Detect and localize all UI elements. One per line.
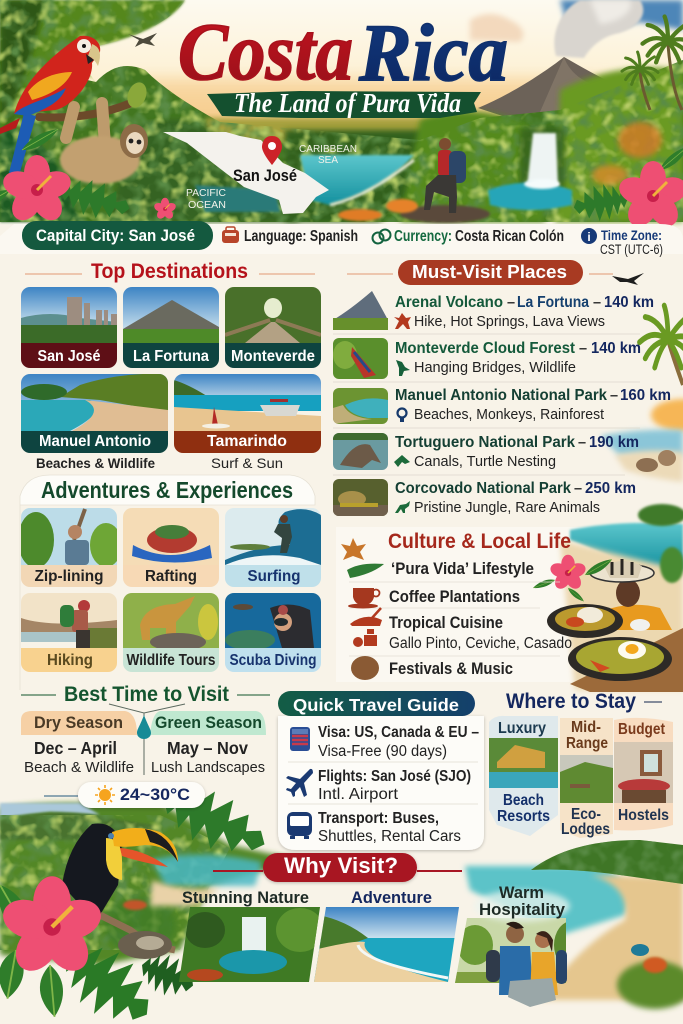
- place: Tortuguero National Park: 190 km: [589, 434, 639, 451]
- hibiscus with leaves: [532, 555, 614, 603]
- panel: quick travel guide: Shuttles, Rental Cars: [318, 828, 461, 845]
- icon: hiker: [394, 313, 411, 329]
- place: Manuel Antonio National Park: [333, 387, 671, 424]
- place: Tortuguero National Park: –: [578, 435, 586, 451]
- title: Rica: [358, 7, 508, 98]
- thumbnail: [333, 291, 388, 330]
- card: zip-lining: [18, 508, 122, 587]
- column: luxury: Resorts: [497, 808, 550, 825]
- map of Costa Rica: [163, 132, 329, 214]
- icon: language: [222, 227, 239, 243]
- place: Corcovado National Park: –: [574, 481, 582, 497]
- card: hiking: Hiking: [47, 652, 93, 669]
- icon: coffee cup: [348, 588, 380, 608]
- key facts bar: CST (UTC-6): [600, 242, 663, 257]
- panel: adventures and experiences: [20, 475, 315, 690]
- place: Arenal Volcano: [333, 291, 654, 330]
- place: Monteverde Cloud Forest: 140 km: [591, 340, 641, 357]
- card: Manuel Antonio: [21, 374, 168, 453]
- heading: where to stay: Where to Stay: [506, 690, 636, 713]
- row dividers: [333, 334, 640, 475]
- map of Costa Rica: San José: [233, 167, 297, 185]
- card: Monteverde: [225, 287, 321, 368]
- destination captions: Surf & Sun: [211, 455, 283, 471]
- reason: stunning nature: [175, 889, 325, 982]
- card: La Fortuna: La Fortuna: [133, 348, 209, 365]
- column: luxury: Luxury: [498, 720, 546, 737]
- card: San José: San José: [38, 348, 101, 365]
- thumbnail: [333, 479, 388, 516]
- place: Corcovado National Park: Pristine Jungle, Rare Animals: [414, 499, 600, 516]
- heading: culture and local life: Culture & Local Life: [388, 530, 571, 553]
- seasons comparison: Dec – April: [34, 738, 117, 758]
- reason: adventure: [314, 889, 460, 982]
- culture list: Coffee Plantations: [389, 588, 520, 606]
- column: mid-range: Range: [566, 735, 608, 752]
- card: zip-lining: Zip-lining: [34, 568, 104, 585]
- panel: culture background beach: [336, 504, 683, 690]
- column: budget: Hostels: [618, 807, 669, 824]
- seasons comparison: May – Nov: [167, 738, 248, 758]
- panel: quick travel guide: Visa: US, Canada & EU –: [318, 724, 479, 741]
- iguana on branch: [100, 915, 175, 959]
- icon: turtle: [394, 455, 410, 467]
- card: surfing: [225, 508, 321, 587]
- place: Arenal Volcano: La Fortuna: [517, 294, 589, 311]
- scarlet macaw on branch: [0, 36, 150, 173]
- header scene: jungle, volcano and river: [0, 0, 683, 223]
- bottom left landscape: [0, 803, 300, 965]
- panel: adventures and experiences: Adventures & Experiences: [41, 477, 293, 503]
- seasons comparison: [21, 704, 266, 776]
- card: scuba diving: [225, 593, 321, 672]
- subtitle banner: The Land of Pura Vida: [234, 88, 461, 118]
- palm leaf: [152, 773, 276, 869]
- heading: must-visit places: [347, 260, 613, 285]
- ocean labels: SEA: [318, 155, 338, 166]
- toucan: [62, 824, 178, 915]
- icon: flower with banner: [341, 538, 384, 578]
- place: Corcovado National Park: 250 km: [585, 480, 636, 497]
- icon: bus: [287, 812, 312, 839]
- heading: quick travel guide: Quick Travel Guide: [293, 695, 459, 715]
- culture list: Tropical Cuisine: [389, 614, 503, 632]
- card: Tamarindo: [174, 374, 321, 453]
- card: hiking: [21, 593, 117, 672]
- heading: quick travel guide: [278, 691, 475, 716]
- card: rafting: [123, 508, 219, 587]
- place: Monteverde Cloud Forest: –: [579, 341, 587, 357]
- icon: plane: [286, 769, 313, 797]
- key facts bar: [0, 221, 683, 257]
- hiker: [424, 138, 466, 213]
- icon: sun: [95, 785, 115, 805]
- icon: visa passport: [290, 727, 310, 751]
- right side scenery: palm, sun glow, beach: [600, 306, 683, 482]
- thumbnail: [333, 433, 388, 470]
- icon: monkey: [398, 408, 406, 422]
- place: Tortuguero National Park: Canals, Turtle Nesting: [414, 453, 556, 470]
- place: Monteverde Cloud Forest: Monteverde Cloud Forest: [395, 340, 576, 357]
- heading: why visit: Why Visit?: [284, 853, 398, 878]
- title: [178, 6, 508, 98]
- thumbnail: [333, 338, 388, 379]
- reason: warm hospitality: [455, 886, 574, 1007]
- card: rafting: Rafting: [145, 568, 197, 585]
- key facts bar: Costa Rican Colón: [455, 228, 564, 245]
- panel: quick travel guide: Flights: San José (SJO): [318, 768, 471, 785]
- seasons comparison: Lush Landscapes: [151, 759, 265, 776]
- place: Monteverde Cloud Forest: [333, 338, 641, 379]
- card: wildlife tours: Wildlife Tours: [126, 652, 216, 669]
- tab: green season: Green Season: [155, 713, 262, 732]
- title: Costa: [178, 6, 353, 97]
- heading: top destinations: Top Destinations: [91, 260, 248, 283]
- culture list: Gallo Pinto, Ceviche, Casado: [389, 635, 572, 652]
- place: Tortuguero National Park: Tortuguero National Park: [395, 434, 575, 451]
- tab: dry season: Dry Season: [34, 713, 123, 732]
- palm trees top right: [622, 16, 683, 110]
- column: mid-range: Eco-: [571, 806, 601, 823]
- location pin: [262, 136, 282, 165]
- place: Tortuguero National Park: [333, 433, 639, 470]
- icon: festival drum: [351, 656, 379, 680]
- reason: warm hospitality: Hospitality: [479, 901, 566, 919]
- place: Arenal Volcano: 140 km: [604, 294, 654, 311]
- heading: best time to visit: Best Time to Visit: [64, 683, 229, 706]
- ocean labels: CARIBBEAN: [299, 144, 357, 155]
- place: Corcovado National Park: [333, 479, 636, 516]
- key facts bar: Currency:: [394, 228, 452, 245]
- destination captions: [36, 455, 283, 471]
- culture list: ‘Pura Vida’ Lifestyle: [391, 560, 534, 578]
- column: luxury: Beach: [503, 792, 544, 809]
- ocean labels: [186, 144, 357, 211]
- reason: warm hospitality: Warm: [499, 884, 544, 902]
- hibiscus flowers and leaves in header: [0, 125, 683, 232]
- bottom right beach scene: [150, 840, 683, 1009]
- bird silhouette: [128, 33, 157, 47]
- destination captions: Beaches & Wildlife: [36, 455, 155, 471]
- column: mid-range: Lodges: [561, 821, 610, 838]
- panel: quick travel guide: Transport: Buses,: [318, 810, 439, 827]
- culture: street cook and plates: [547, 559, 683, 692]
- ocean labels: OCEAN: [188, 200, 226, 211]
- temperature pill: 24~30°C: [120, 785, 190, 804]
- icon: water drop: [137, 715, 151, 739]
- place: Arenal Volcano: –: [593, 295, 601, 311]
- icon: animal: [395, 501, 410, 513]
- card: Tamarindo: Tamarindo: [207, 433, 287, 450]
- column: budget: Budget: [618, 721, 666, 738]
- place: Monteverde Cloud Forest: Hanging Bridges, Wildlife: [414, 359, 576, 376]
- panel: quick travel guide: [278, 716, 484, 850]
- key facts bar: Capital City: San José: [36, 227, 195, 245]
- place: Manuel Antonio National Park: 160 km: [620, 387, 671, 404]
- bottom left flower and leaves: [0, 876, 200, 1024]
- card: Monteverde: Monteverde: [231, 348, 315, 365]
- icon: seabird: [612, 273, 644, 285]
- column: mid-range: Mid-: [571, 719, 601, 736]
- card: surfing: Surfing: [248, 568, 300, 585]
- culture list: [341, 538, 572, 680]
- card: scuba diving: Scuba Diving: [230, 652, 316, 669]
- place: Corcovado National Park: Corcovado National Park: [395, 480, 571, 497]
- thumbnail: [333, 388, 388, 424]
- heading: must-visit places: Must-Visit Places: [412, 261, 567, 282]
- tab: dry season: [21, 711, 137, 735]
- panel: quick travel guide: Visa-Free (90 days): [318, 743, 447, 760]
- ocean labels: PACIFIC: [186, 188, 226, 199]
- column: mid-range: [560, 718, 613, 838]
- couple with map: [486, 922, 567, 1007]
- reason: adventure: Adventure: [351, 889, 432, 907]
- key facts bar: Language: Spanish: [244, 228, 358, 245]
- column: budget: [614, 718, 673, 830]
- icon: cooking: [350, 608, 382, 647]
- seasons comparison: Beach & Wildlife: [24, 759, 134, 776]
- icon: tree: [396, 360, 410, 376]
- place: Manuel Antonio National Park: –: [610, 388, 618, 404]
- temperature pill: [44, 782, 205, 808]
- place: Manuel Antonio National Park: Beaches, Monkeys, Rainforest: [414, 406, 605, 423]
- card: wildlife tours: [123, 593, 219, 672]
- place: Arenal Volcano: Hike, Hot Springs, Lava Views: [414, 313, 605, 330]
- card: San José: [21, 287, 117, 368]
- icon: currency: [372, 230, 390, 244]
- column: luxury: [489, 716, 558, 836]
- icon: time zone: [581, 228, 597, 244]
- sloth: [60, 103, 148, 184]
- key facts bar: Time Zone:: [601, 227, 662, 243]
- icon: time zone: i: [587, 230, 591, 244]
- place: Manuel Antonio National Park: Manuel Antonio National Park: [395, 387, 607, 404]
- card: Manuel Antonio: Manuel Antonio: [39, 433, 151, 450]
- place: Arenal Volcano: Arenal Volcano: [395, 294, 503, 311]
- card: La Fortuna: [123, 287, 219, 368]
- heading: why visit: [213, 853, 462, 882]
- reason: stunning nature: Stunning Nature: [182, 889, 309, 907]
- panel: quick travel guide: Intl. Airport: [318, 786, 399, 803]
- place: Arenal Volcano: –: [507, 295, 515, 311]
- culture list: Festivals & Music: [389, 660, 513, 678]
